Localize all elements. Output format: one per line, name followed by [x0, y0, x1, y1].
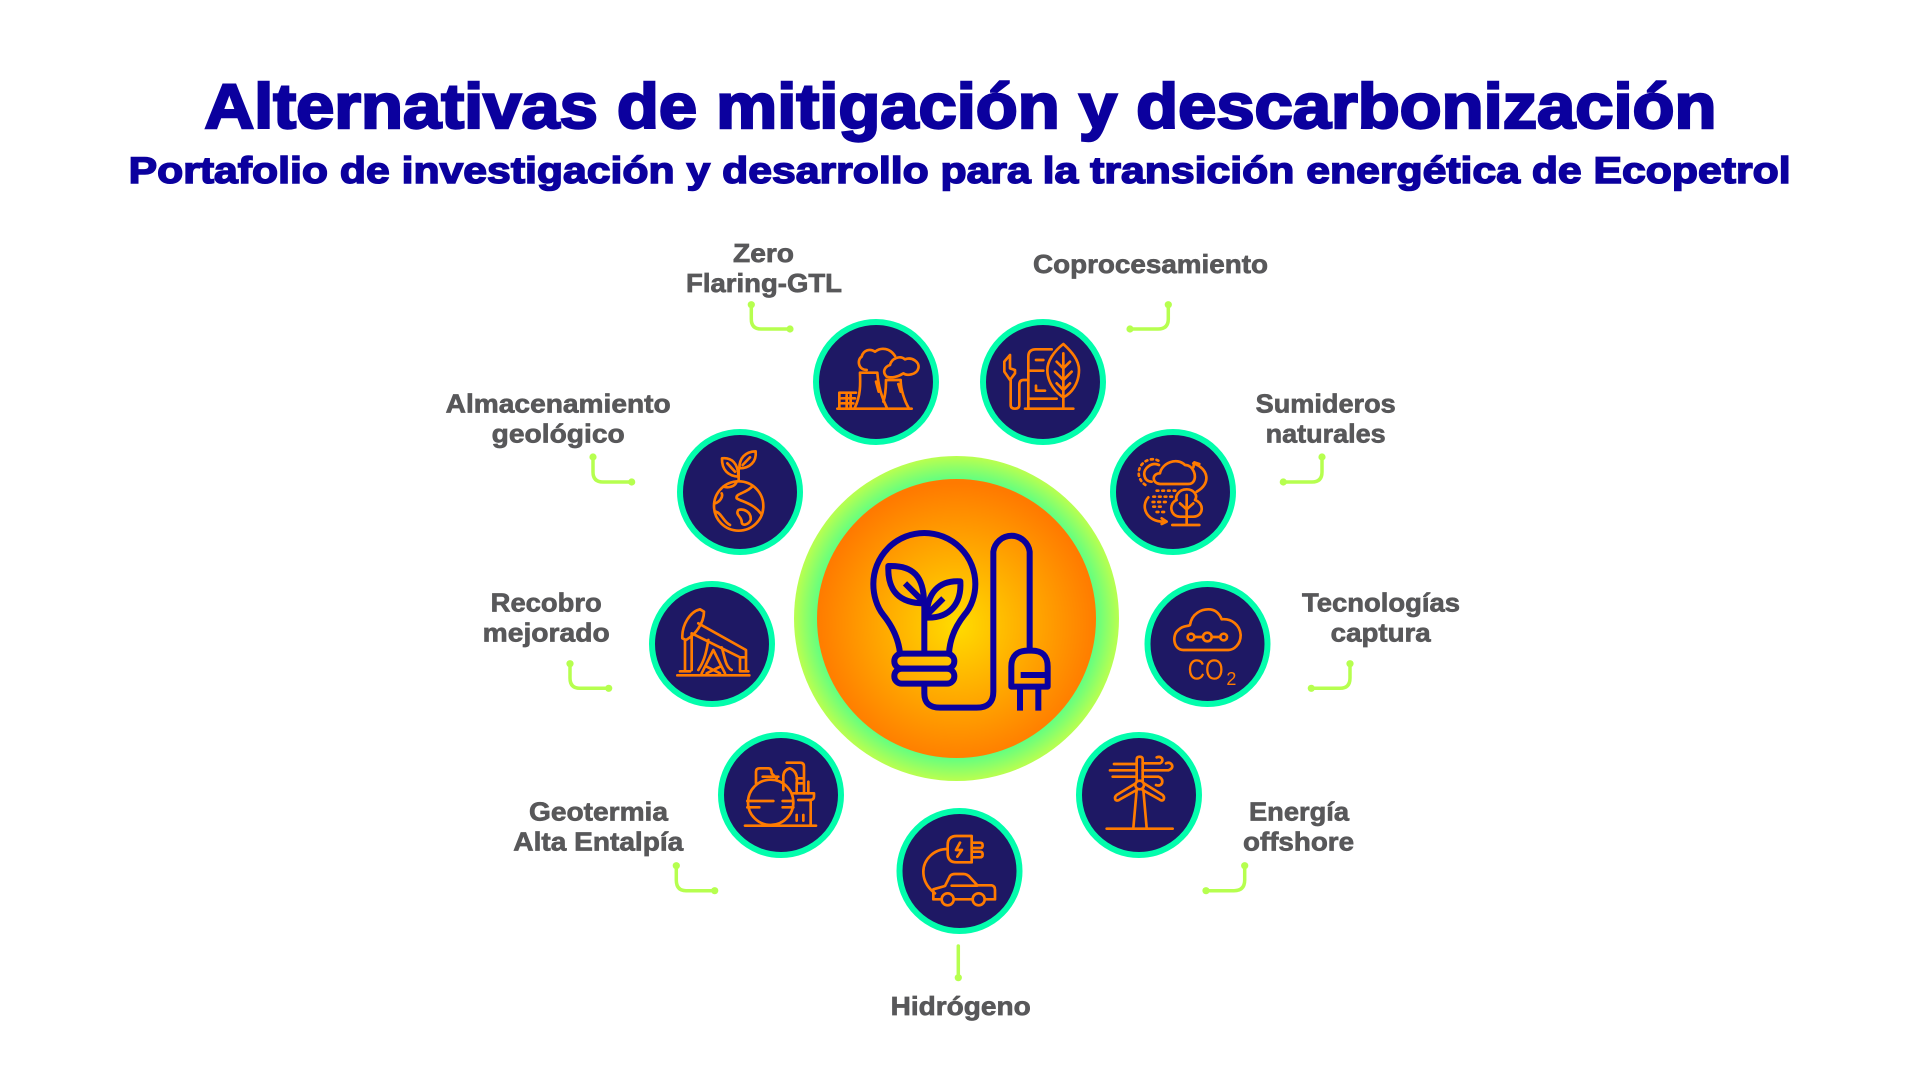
label — [1302, 588, 1460, 648]
icon: fuel pump with leaf — [1004, 344, 1079, 409]
label: Hidrógeno — [891, 991, 1031, 1021]
label — [513, 797, 684, 857]
icon: bulb and plug — [873, 533, 1048, 711]
node: Almacenamiento geológico — [446, 389, 800, 552]
connector — [1280, 453, 1326, 486]
title: Alternativas de mitigación y descarbonización — [204, 72, 1716, 142]
label: Energía — [1249, 797, 1350, 827]
connector — [589, 453, 635, 486]
icon: refinery tank — [745, 763, 816, 826]
node: Energía offshore — [1079, 735, 1354, 894]
label — [1256, 389, 1396, 449]
connector — [673, 862, 718, 894]
label: Coprocesamiento — [1033, 249, 1268, 279]
node: Coprocesamiento — [983, 249, 1268, 442]
label: captura — [1331, 618, 1431, 648]
connector — [1308, 660, 1354, 692]
node: Geotermia Alta Entalpía — [513, 735, 841, 894]
label — [483, 588, 610, 648]
icon: cooling towers — [837, 349, 919, 409]
node: Tecnologías captura — [1148, 584, 1460, 704]
icon: wind turbine — [1107, 757, 1173, 829]
label: Sumideros — [1256, 389, 1396, 419]
subtitle: Portafolio de investigación y desarrollo para la transición energética de Ecopetrol — [129, 150, 1791, 191]
icon: CO2 cloud: 2 — [1226, 668, 1236, 689]
icon: weather cycle and tree — [1139, 459, 1206, 525]
label: geológico — [492, 419, 625, 449]
label: naturales — [1266, 419, 1386, 449]
label: Recobro — [491, 588, 602, 618]
node: Sumideros naturales — [1113, 389, 1396, 552]
label: Tecnologías — [1302, 588, 1460, 618]
connector — [748, 301, 794, 333]
node: Recobro mejorado — [483, 584, 772, 704]
connector — [955, 946, 962, 981]
label: Almacenamiento — [446, 389, 671, 419]
label — [686, 238, 842, 298]
connector — [1126, 301, 1172, 333]
connector — [566, 660, 612, 692]
label — [446, 389, 671, 449]
label — [1243, 797, 1354, 857]
label: Alta Entalpía — [513, 827, 684, 857]
icon: globe with sprout — [714, 451, 763, 531]
icon: oil pumpjack — [677, 609, 749, 675]
node: Hidrógeno — [891, 811, 1031, 1021]
label: mejorado — [483, 618, 610, 648]
central hub: light bulb with plug — [794, 456, 1119, 781]
icon: CO2 cloud — [1174, 609, 1241, 689]
icon: CO2 cloud: CO — [1188, 655, 1224, 687]
node: Zero Flaring-GTL — [686, 238, 936, 442]
connector — [1202, 862, 1248, 894]
label: Geotermia — [529, 797, 669, 827]
label: Flaring-GTL — [686, 268, 842, 298]
icon: electric car with plug — [923, 836, 995, 905]
label: offshore — [1243, 827, 1354, 857]
label: Zero — [733, 238, 794, 268]
